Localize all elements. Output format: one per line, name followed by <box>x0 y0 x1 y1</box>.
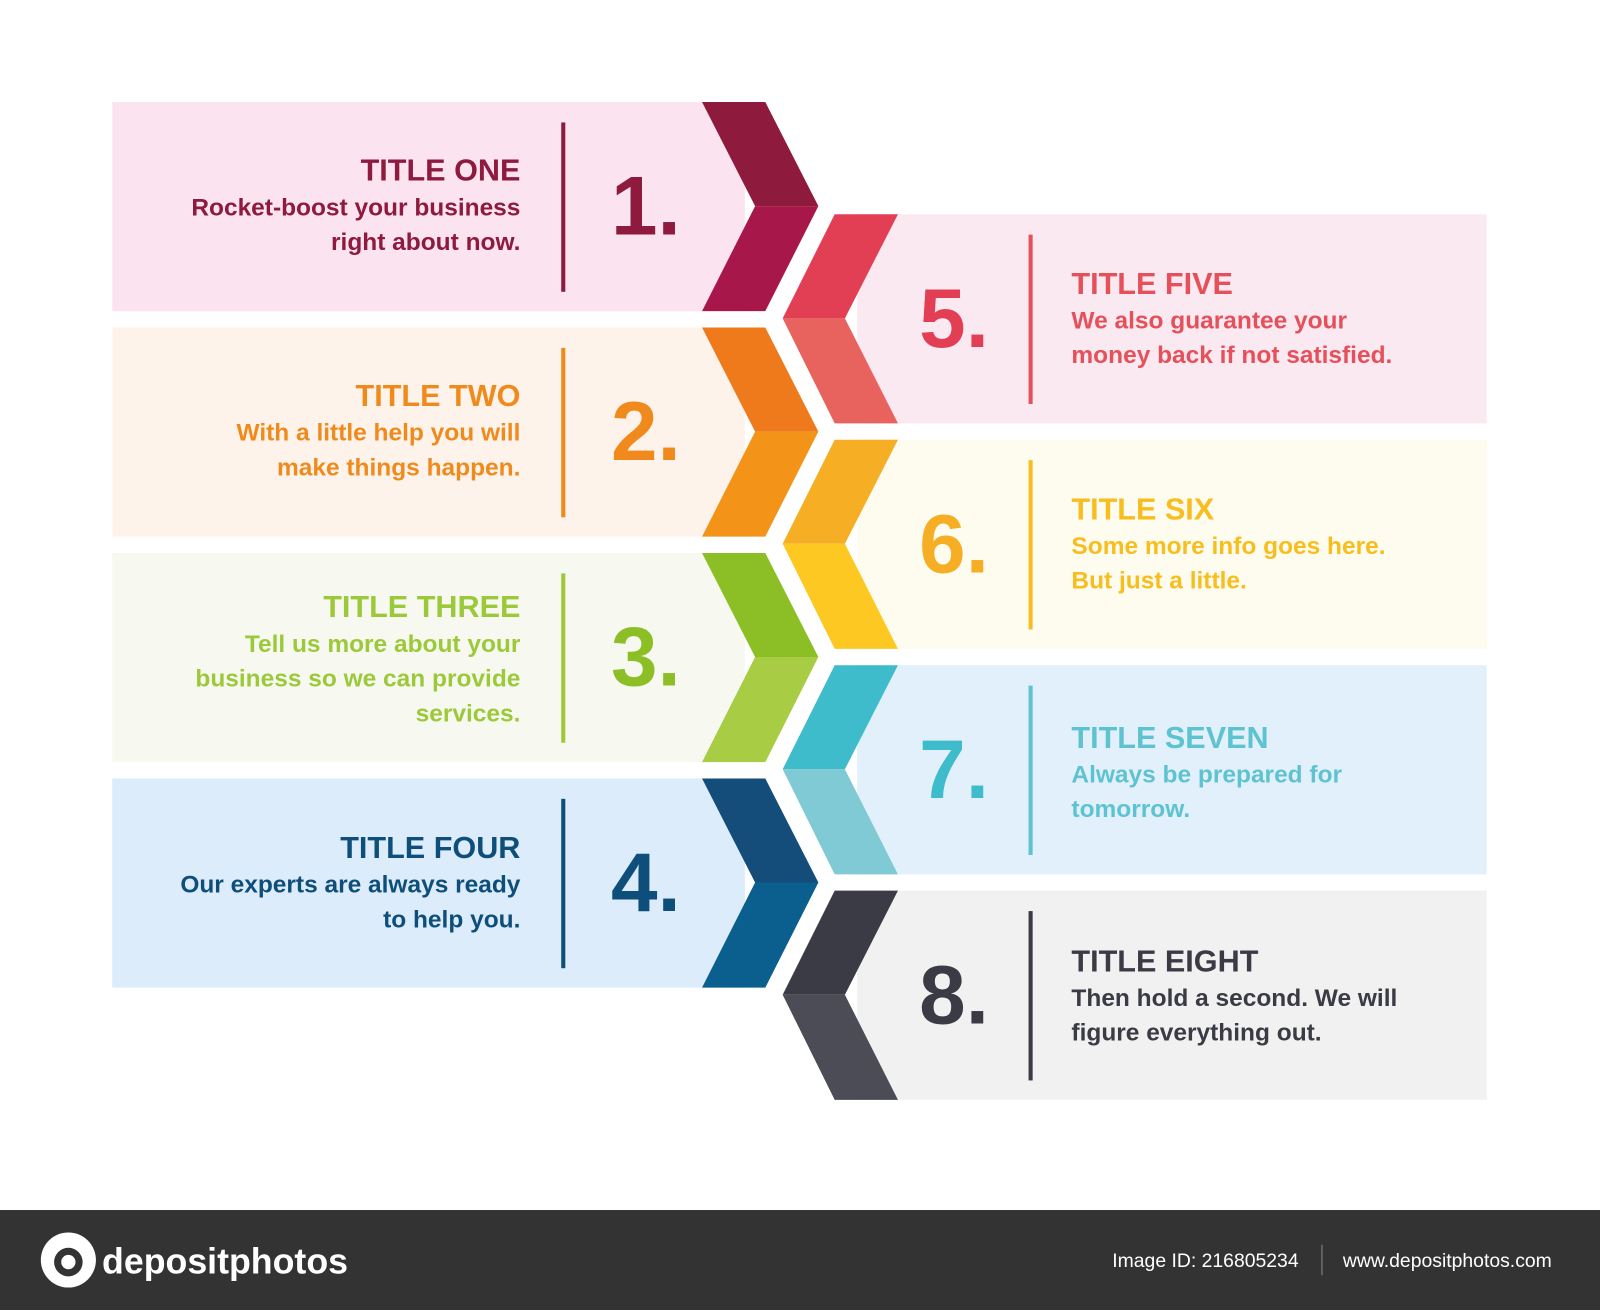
number 4: 4. <box>611 835 681 929</box>
text 6: TITLE SIX <box>1071 492 1215 526</box>
text 8: figure everything out. <box>1071 1020 1322 1047</box>
website: www.depositphotos.com <box>1342 1250 1552 1272</box>
number 3: 3. <box>611 610 681 704</box>
chevron 4 <box>702 778 818 988</box>
text 1 <box>191 154 520 256</box>
chevron 7 <box>783 665 898 874</box>
panel: step 5 <box>783 214 1487 423</box>
chevron 2 <box>702 328 818 537</box>
text 5: We also guarantee your <box>1071 308 1348 335</box>
text 3: Tell us more about your <box>245 631 521 658</box>
text 4 <box>180 831 521 933</box>
panel: step 2 <box>112 328 818 537</box>
footer <box>0 1210 1600 1310</box>
text 7 <box>1071 721 1343 823</box>
number 2: 2. <box>611 384 681 478</box>
text 7: Always be prepared for <box>1071 762 1343 789</box>
text 4: TITLE FOUR <box>340 831 520 865</box>
panel: step 1 <box>112 102 818 311</box>
chevron 6 <box>783 440 898 649</box>
text 7: TITLE SEVEN <box>1071 721 1269 755</box>
text 5 <box>1071 267 1392 369</box>
text 4: to help you. <box>383 906 520 933</box>
text 3: TITLE THREE <box>323 590 520 624</box>
text 3: services. <box>416 700 520 727</box>
image id: Image ID: 216805234 <box>1112 1250 1299 1272</box>
number 1: 1. <box>611 159 681 253</box>
text 1: right about now. <box>331 229 520 256</box>
text 1: Rocket-boost your business <box>191 194 520 221</box>
text 2: make things happen. <box>277 454 520 481</box>
text 3 <box>195 590 521 727</box>
number 7: 7. <box>919 722 989 816</box>
chevron 1 <box>702 102 818 311</box>
panel: step 7 <box>783 665 1487 874</box>
number 6: 6. <box>919 496 989 590</box>
brand name: depositphotos <box>102 1241 348 1281</box>
panel: step 8 <box>783 891 1487 1100</box>
text 5: TITLE FIVE <box>1071 267 1233 301</box>
text 8: Then hold a second. We will <box>1071 985 1397 1012</box>
text 8: TITLE EIGHT <box>1071 944 1259 978</box>
text 3: business so we can provide <box>195 666 520 693</box>
text 2: With a little help you will <box>236 420 520 447</box>
text 2 <box>236 379 520 481</box>
number 5: 5. <box>919 271 989 365</box>
text 8 <box>1071 944 1397 1047</box>
chevron 3 <box>702 553 818 762</box>
chevron 8 <box>783 891 898 1100</box>
chevron 5 <box>783 214 898 423</box>
icon: logo <box>41 1232 96 1288</box>
text 6 <box>1071 492 1386 595</box>
text 2: TITLE TWO <box>356 379 520 413</box>
panel: step 3 <box>112 553 818 762</box>
text 7: tomorrow. <box>1071 796 1190 823</box>
text 6: Some more info goes here. <box>1071 533 1386 560</box>
text 4: Our experts are always ready <box>180 872 521 899</box>
number 8: 8. <box>919 947 989 1041</box>
text 6: But just a little. <box>1071 568 1247 595</box>
text 5: money back if not satisfied. <box>1071 342 1392 369</box>
panel: step 6 <box>783 440 1487 649</box>
text 1: TITLE ONE <box>361 154 520 188</box>
panel: step 4 <box>112 778 818 988</box>
